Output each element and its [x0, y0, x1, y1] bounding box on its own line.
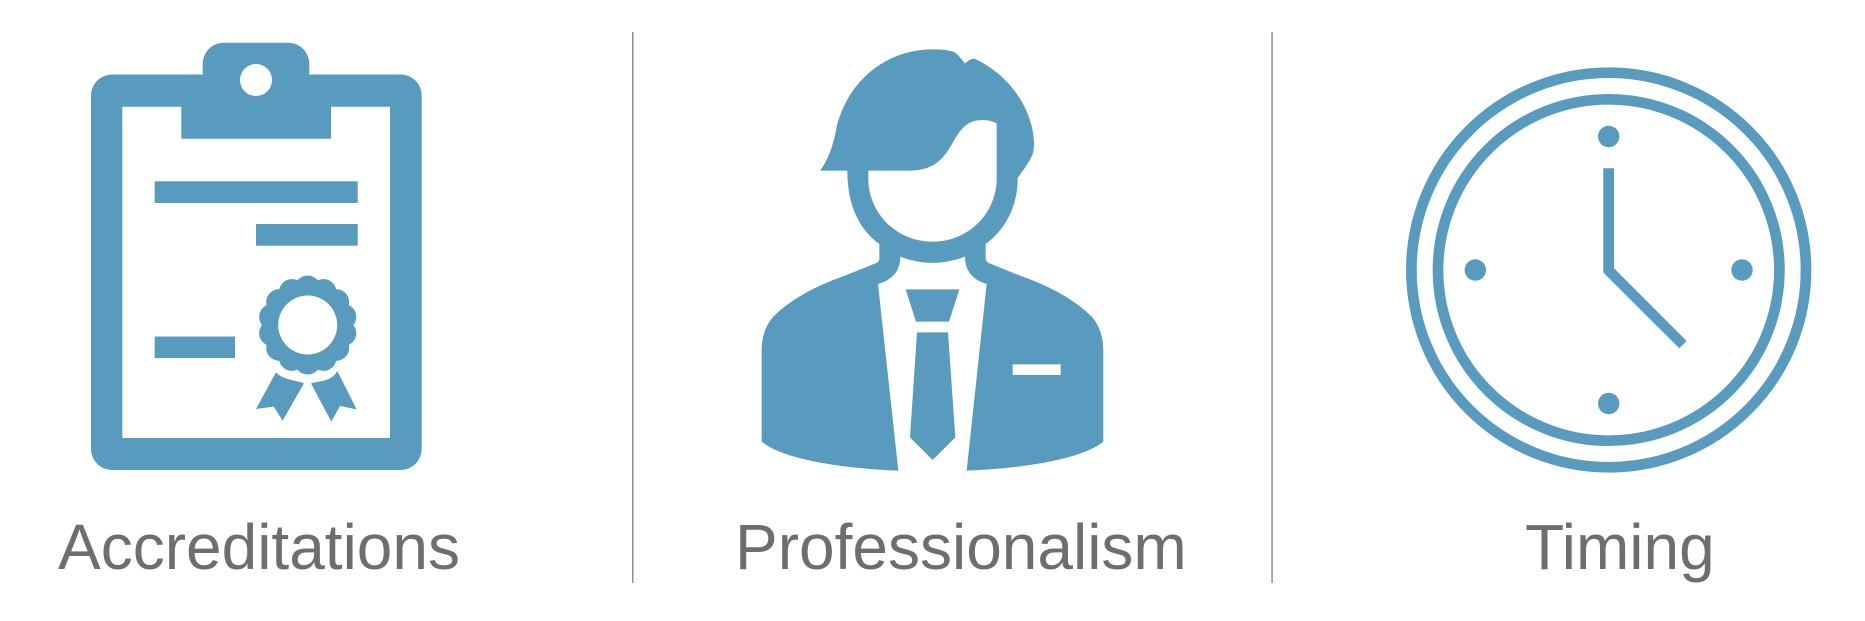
- outer ring: [1411, 73, 1806, 467]
- tie knot: [906, 289, 959, 322]
- panel: accreditations: [58, 43, 460, 583]
- tie: [910, 332, 955, 460]
- divider 1: [632, 32, 634, 583]
- divider 2: [1271, 32, 1273, 583]
- rosette seal: [257, 275, 359, 375]
- rosette ribbons: [256, 371, 357, 422]
- icon: businessman: [762, 49, 1103, 471]
- panel: professionalism: [735, 49, 1187, 583]
- certificate text line 1: [155, 181, 358, 203]
- panel: timing: [1411, 73, 1806, 583]
- certificate text line 2: [256, 224, 358, 246]
- breast pocket: [1013, 364, 1061, 375]
- inner ring: [1438, 99, 1779, 441]
- label: Accreditations: Accreditations: [58, 511, 460, 583]
- hour dots: [1465, 126, 1753, 414]
- clipboard body: [91, 43, 422, 470]
- icon: clock: [1411, 73, 1806, 467]
- icon: clipboard with certificate: [91, 43, 422, 470]
- label: Professionalism: Professionalism: [735, 511, 1187, 583]
- head, hair and suit: [762, 49, 1103, 471]
- certificate text line 3: [155, 336, 235, 358]
- clock hands: [1603, 168, 1687, 348]
- label: Timing: Timing: [1525, 511, 1715, 583]
